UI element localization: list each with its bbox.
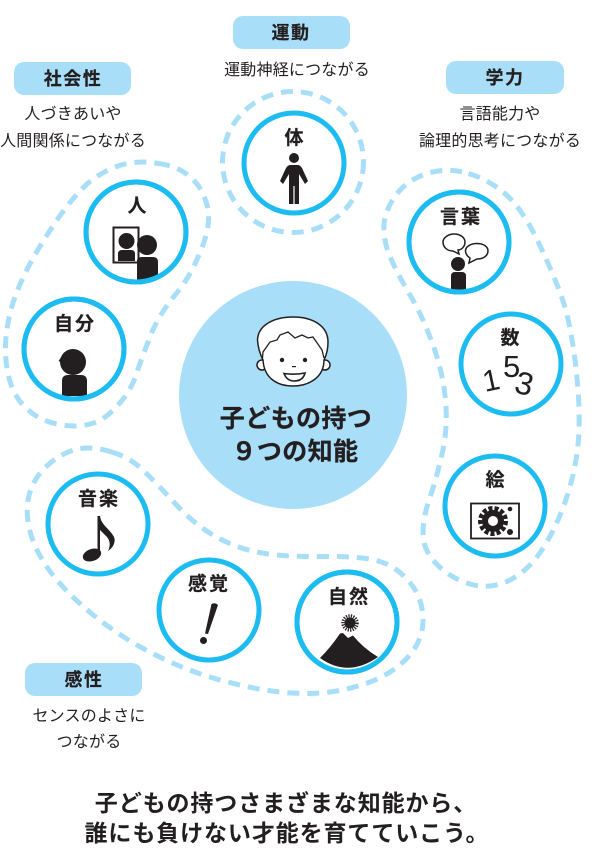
icon: numbers 1 5 3 (480, 349, 537, 403)
panel: 感性 label (25, 663, 146, 751)
node: 数 (461, 314, 561, 414)
node: 体 (244, 113, 344, 213)
panel: 社会性 label: 社会性 (44, 69, 102, 89)
node: 自然 (297, 572, 397, 672)
dashed group: 感性 (27, 448, 423, 694)
node: 言葉: 言葉 (440, 206, 482, 228)
node: 言葉 (409, 192, 509, 292)
panel: 感性 label: センスのよさに (32, 707, 146, 725)
node: 体: 体 (284, 127, 306, 149)
panel: 学力 label: 学力 (486, 67, 524, 88)
node: 音楽 (48, 474, 148, 574)
icon: child face (257, 317, 330, 386)
icon: person with speech bubbles (443, 234, 488, 290)
node: 絵: 絵 (485, 469, 507, 491)
dashed group: 学力 (384, 170, 579, 586)
icon: person profile (58, 349, 87, 396)
node: 自分 (24, 299, 124, 399)
node: 音楽: 音楽 (78, 488, 120, 510)
node: 感覚 (159, 560, 259, 660)
panel: 運動 label (224, 16, 370, 79)
panel: 学力 label: 言語能力や (459, 105, 541, 123)
center circle: 子どもの持つ9つの知能 (179, 281, 407, 509)
node: 絵 (445, 456, 545, 556)
icon: music note (81, 516, 115, 564)
icon: numbers 1 5 3: 5 (503, 349, 520, 384)
center circle: 子どもの持つ9つの知能: ９つの知能 (231, 438, 359, 466)
icon: numbers 1 5 3: 1 (480, 363, 503, 399)
panel: 感性 label: つながる (57, 733, 121, 751)
panel: 社会性 label: 人間関係につながる (0, 132, 146, 150)
dashed group: 社会性 (5, 162, 209, 426)
icon: mountain and sun (320, 616, 378, 668)
icon: person and mirror (114, 228, 158, 280)
panel: 学力 label (419, 61, 581, 150)
icon: numbers 1 5 3: 3 (511, 364, 537, 403)
closing message: 誰にも負けない才能を育てていこう。 (85, 820, 489, 846)
icon: exclamation mark (200, 603, 218, 644)
node: 人: 人 (127, 196, 149, 217)
dashed group: 運動 (222, 92, 364, 232)
node: 自然: 自然 (328, 585, 370, 608)
closing message: 子どもの持つさまざまな知能から、 (95, 790, 477, 816)
node: 感覚: 感覚 (188, 572, 230, 595)
panel: 社会性 label (0, 62, 146, 150)
closing message (85, 790, 489, 846)
panel: 運動 label: 運動神経につながる (224, 61, 370, 79)
node: 数: 数 (500, 327, 522, 349)
icon: standing person (280, 153, 308, 204)
icon: framed flower picture (471, 504, 519, 538)
panel: 感性 label: 感性 (64, 669, 104, 690)
node: 人 (86, 182, 186, 282)
panel: 運動 label: 運動 (272, 23, 310, 43)
panel: 社会性 label: 人づきあいや (24, 105, 122, 123)
node: 自分: 自分 (54, 313, 96, 335)
panel: 学力 label: 論理的思考につながる (419, 132, 581, 150)
center circle: 子どもの持つ9つの知能: 子どもの持つ (220, 405, 372, 433)
